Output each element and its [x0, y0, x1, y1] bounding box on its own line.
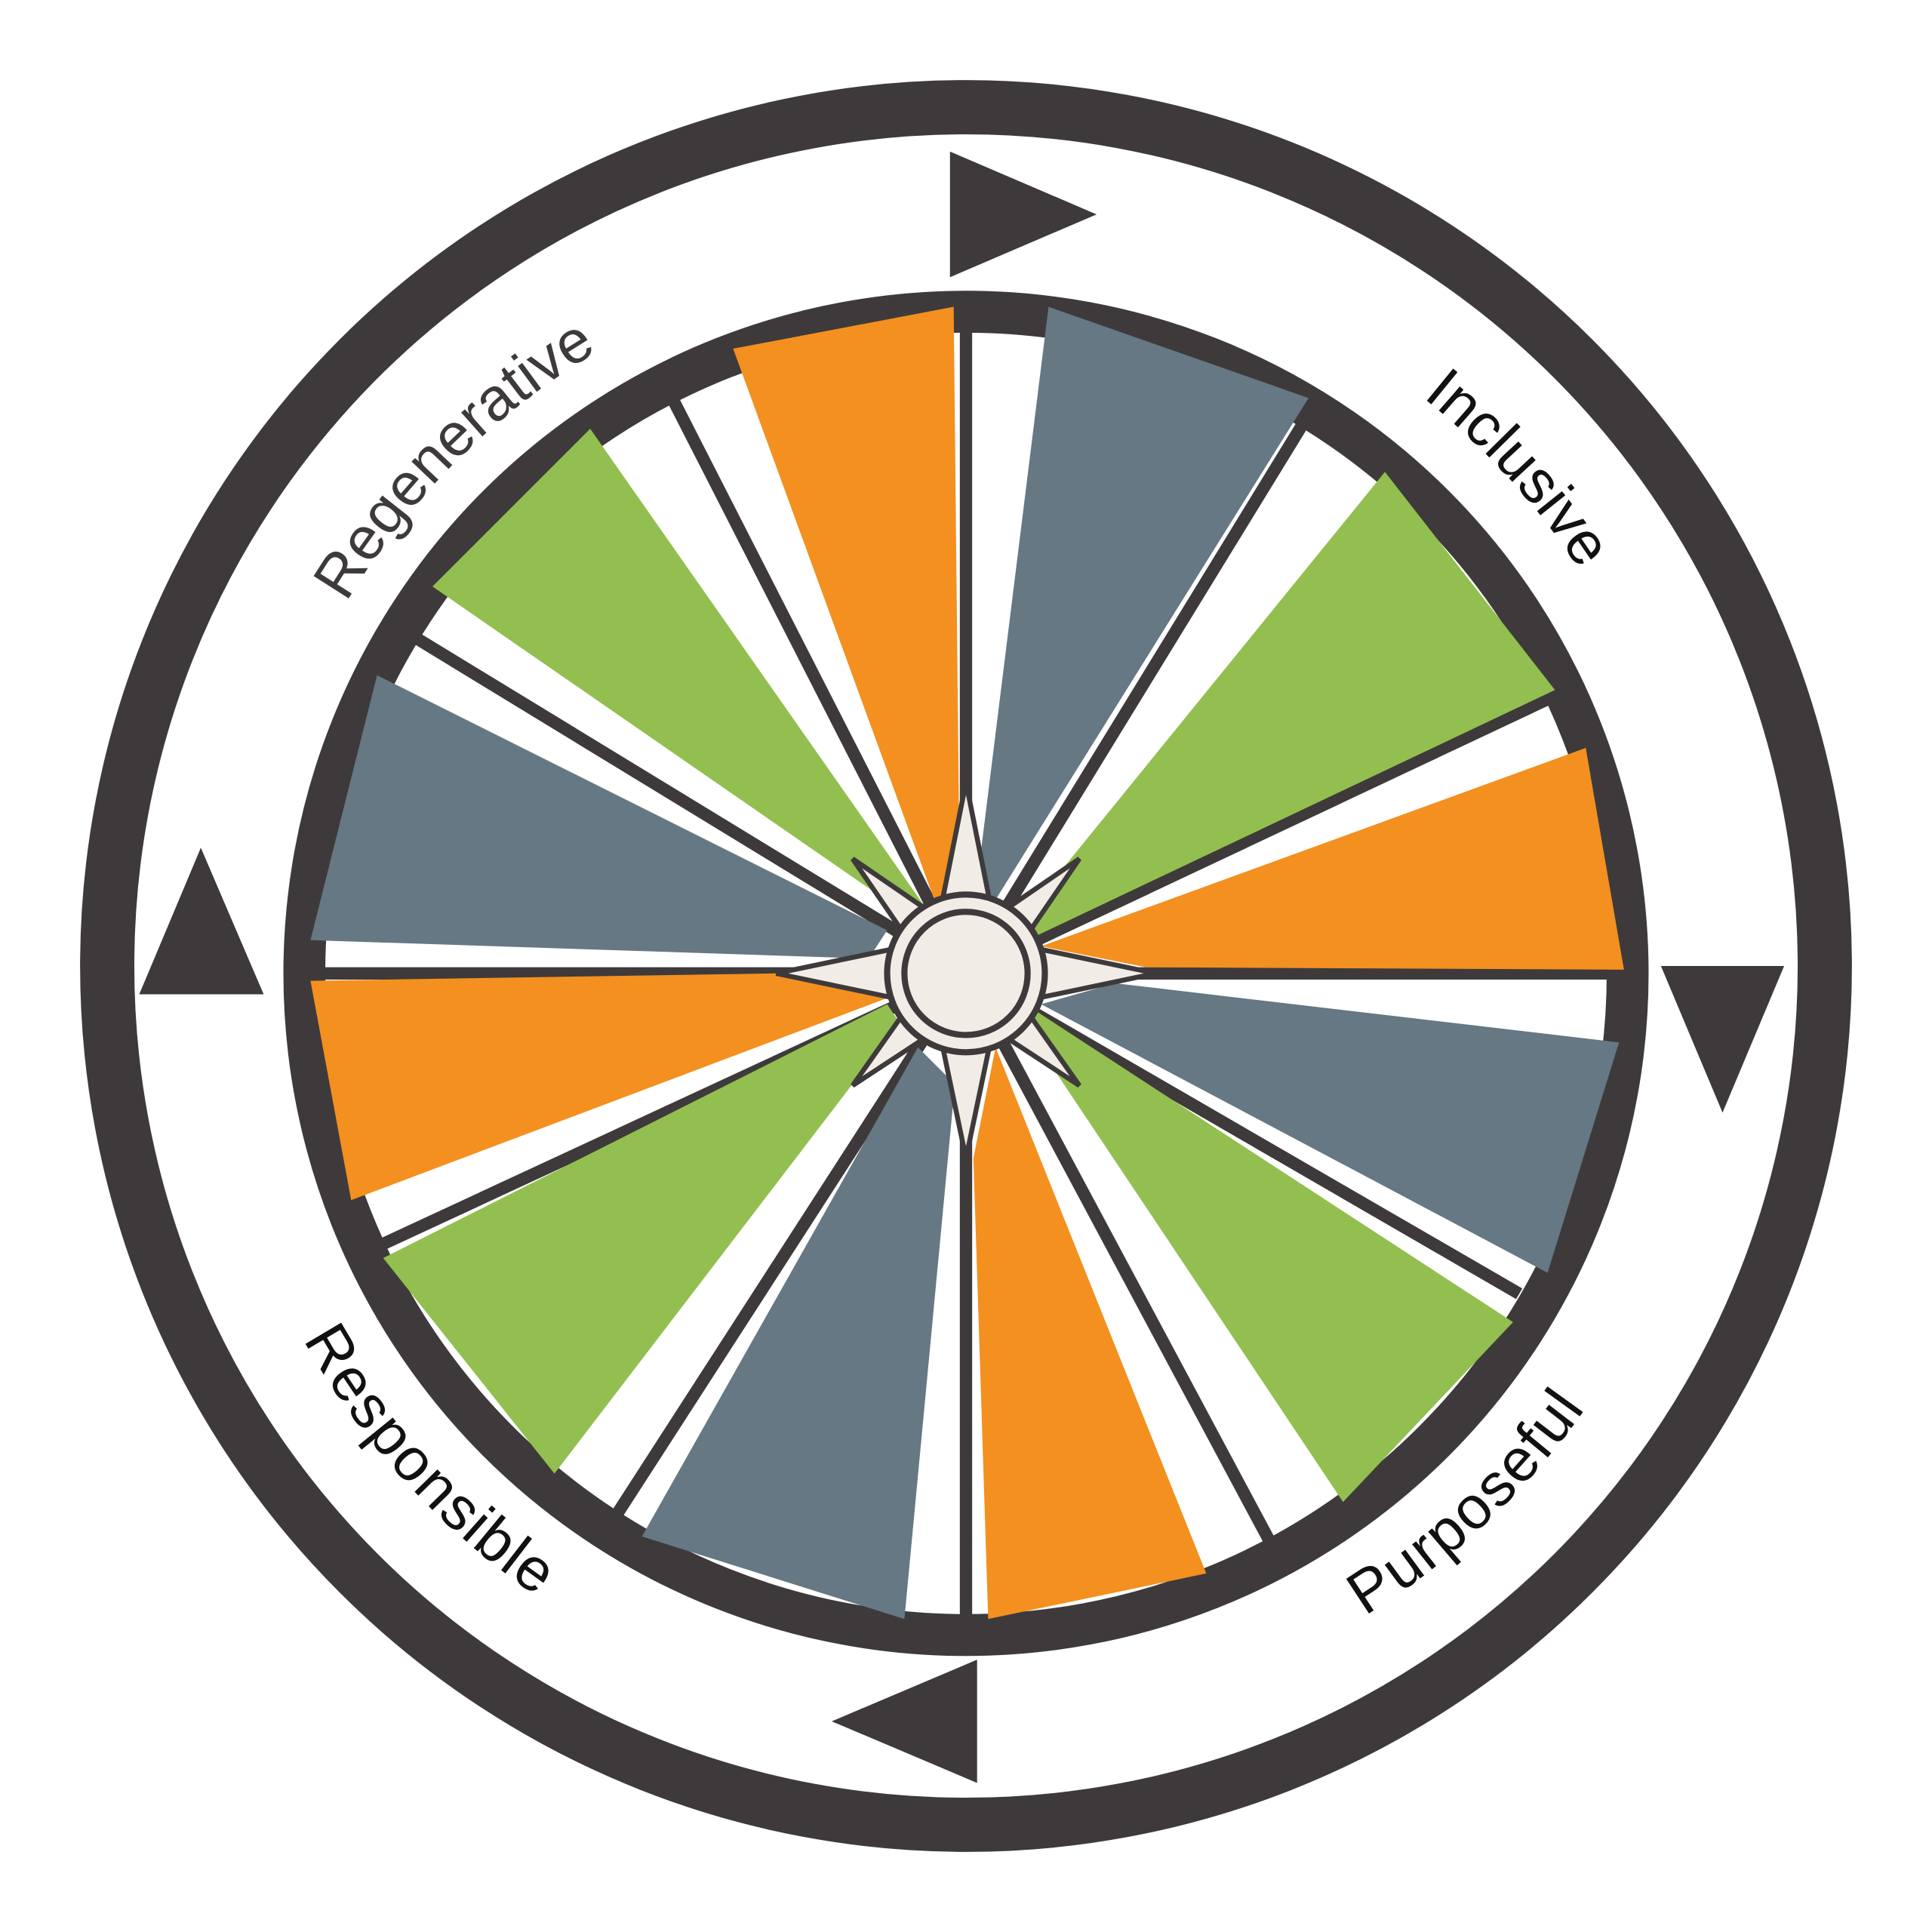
wedge: green upper-left	[432, 429, 924, 918]
spokes	[308, 314, 1624, 1620]
wedge: green upper-right	[1023, 472, 1555, 937]
wedge: orange left	[310, 974, 888, 1200]
wedges	[310, 307, 1624, 1619]
inner wheel ring	[304, 312, 1628, 1635]
label: Regenerative: Regenerative	[314, 330, 592, 598]
compass star	[777, 783, 1155, 1158]
label: Purposeful: Purposeful	[1346, 1386, 1583, 1614]
label: Inclusive: Inclusive	[1426, 368, 1600, 564]
triangle arrow: top	[950, 152, 1097, 277]
wedge: gray left	[310, 675, 888, 958]
wedge: green lower-left	[383, 1004, 900, 1474]
outer ring	[107, 107, 1825, 1825]
wedge: gray right	[1041, 983, 1619, 1273]
triangle arrow: right	[1661, 966, 1784, 1112]
wedge: orange top	[733, 307, 960, 906]
wedge: gray top-right	[980, 307, 1309, 906]
wedge: orange right	[1041, 748, 1624, 970]
wedge: orange bottom	[974, 1048, 1206, 1619]
triangle arrow: left	[139, 848, 263, 995]
wedge: green lower-right	[1023, 1011, 1513, 1502]
label: Responsible: Responsible	[305, 1322, 549, 1591]
triangle arrow: bottom	[832, 1660, 977, 1783]
wedge: gray bottom	[642, 1048, 955, 1619]
